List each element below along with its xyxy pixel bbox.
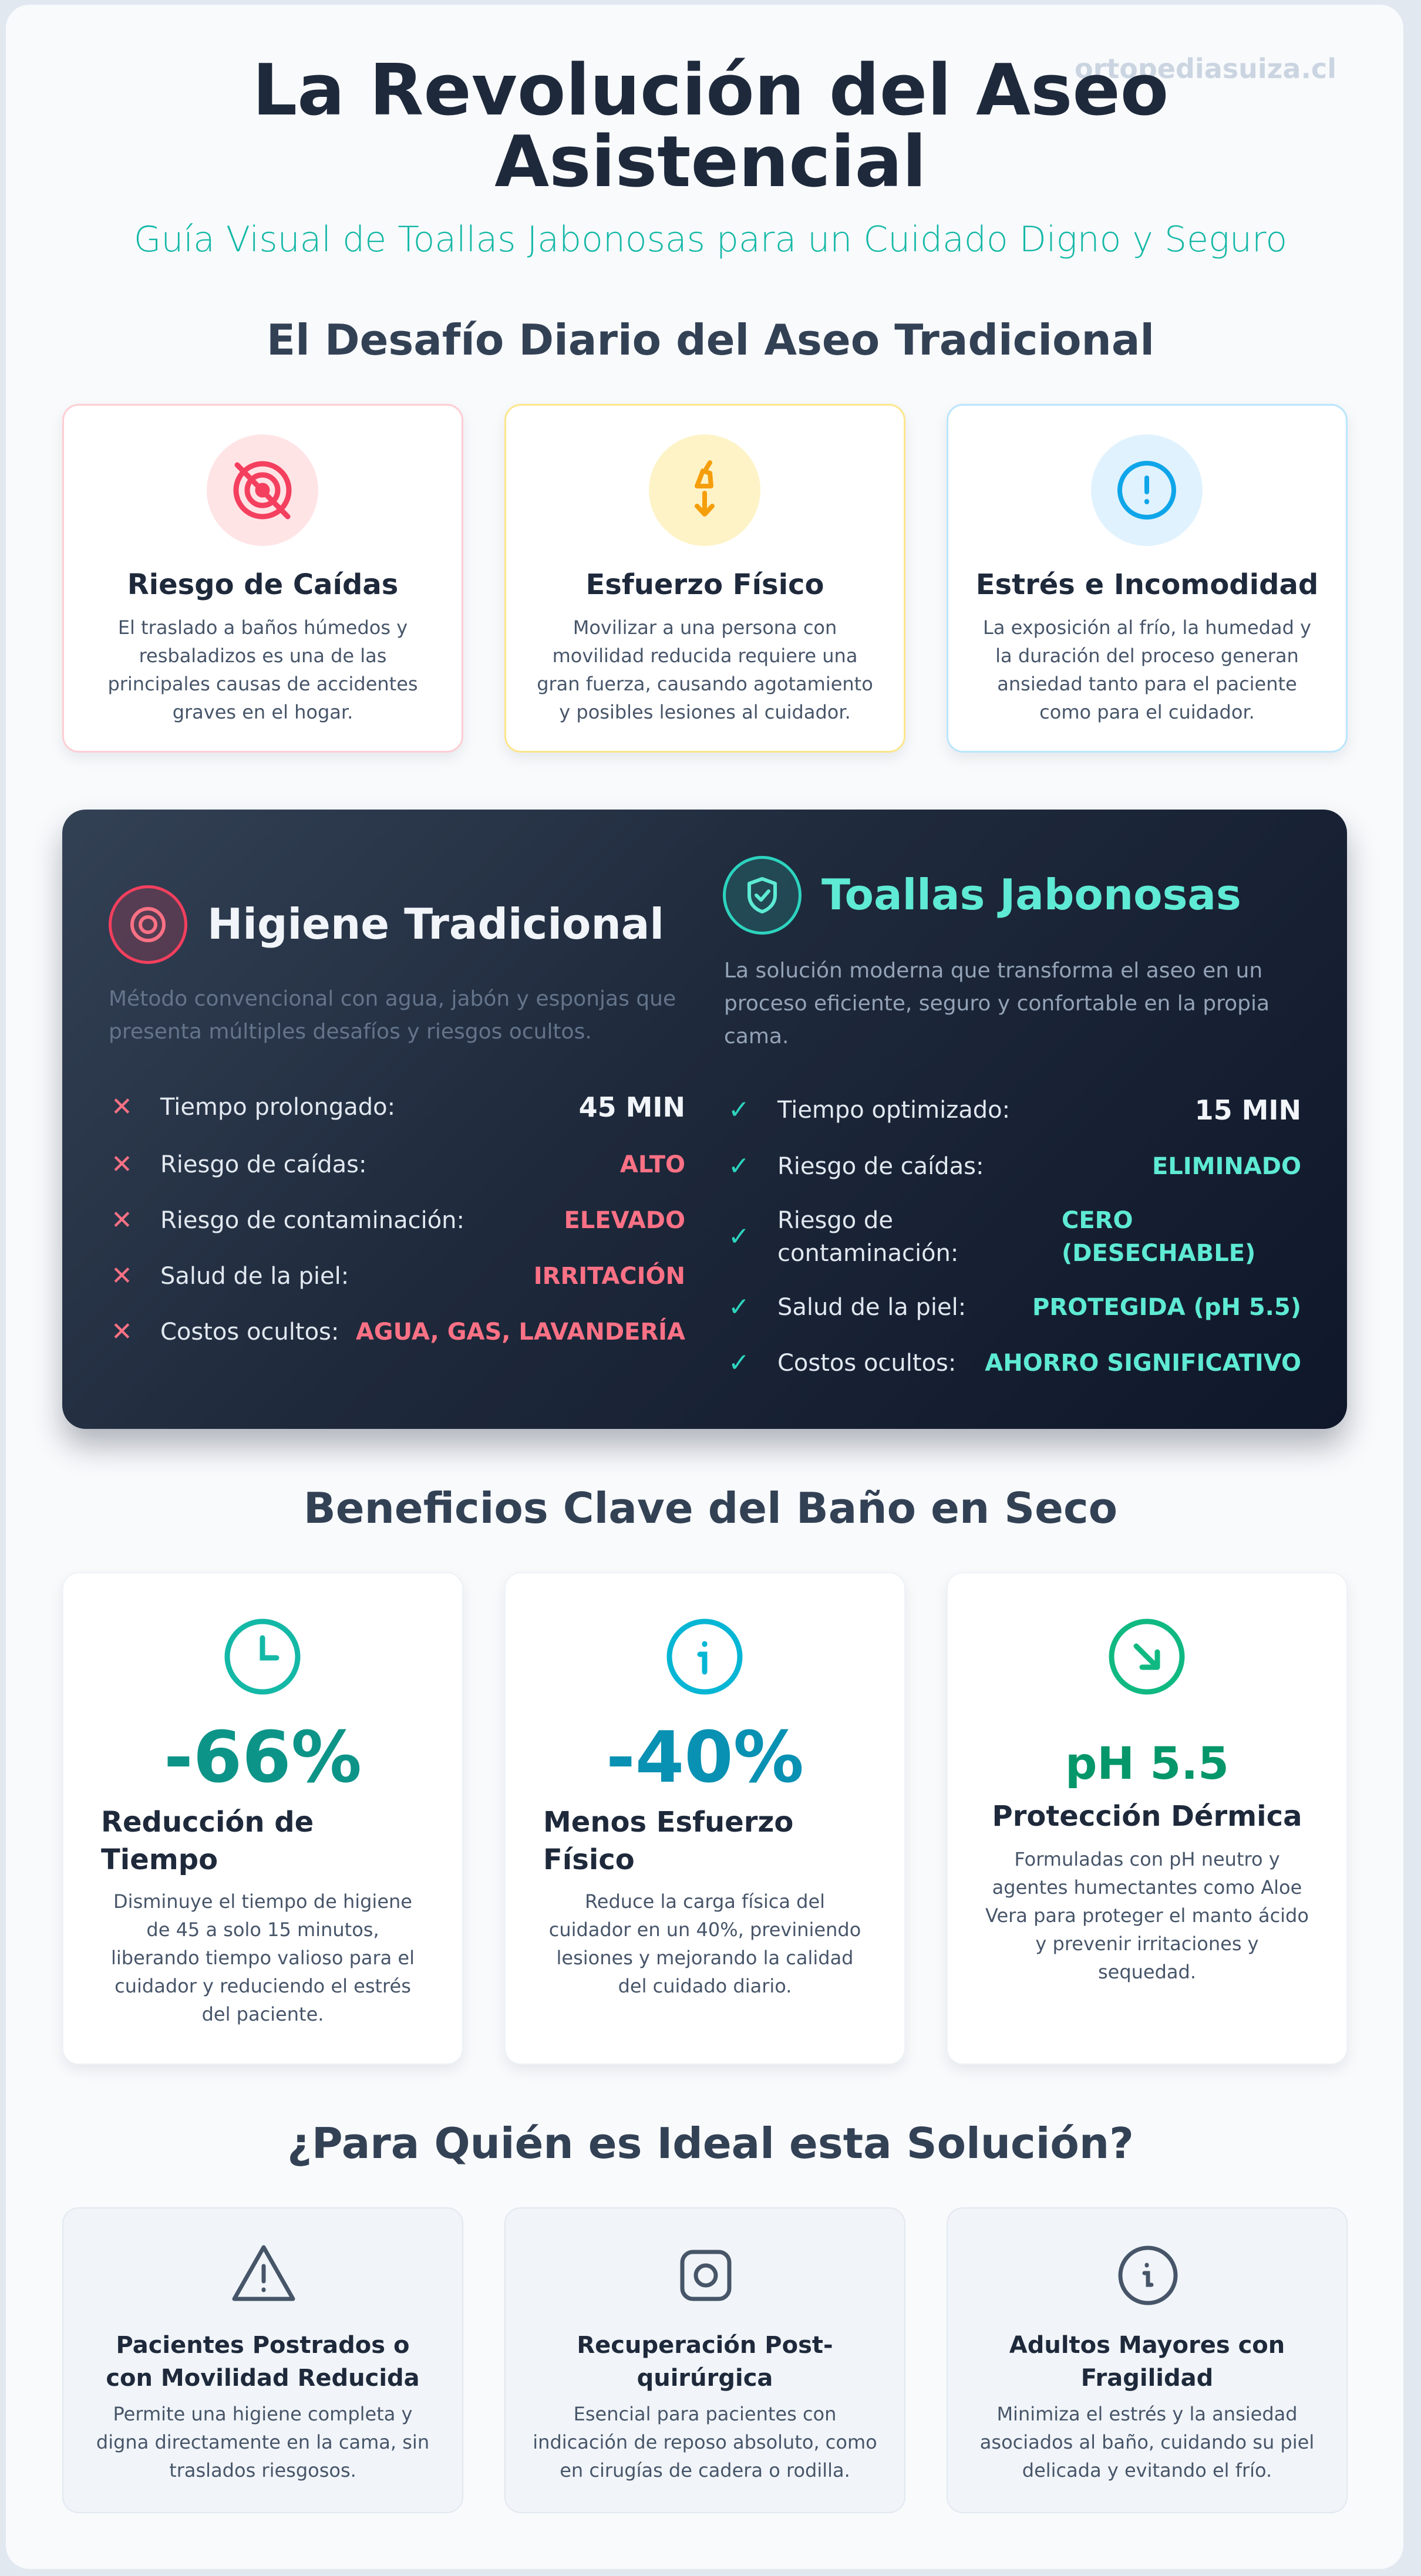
list: traditional: ALTO (620, 1151, 685, 1178)
icon: lift (649, 434, 760, 546)
list: traditional: AGUA, GAS, LAVANDERÍA (356, 1319, 685, 1346)
list: toallas: AHORRO SIGNIFICATIVO (985, 1350, 1301, 1377)
icon: traditional (109, 885, 187, 964)
list: traditional (111, 1091, 685, 1347)
card title: con Movilidad Reducida (106, 2365, 420, 2392)
card title (1009, 2332, 1285, 2392)
card title: Menos Esfuerzo (543, 1806, 793, 1839)
list: traditional: Riesgo de caídas: (160, 1151, 366, 1178)
list: toallas: ✓ (728, 1348, 750, 1378)
watermark: ortopediasuiza.cl (1075, 53, 1336, 85)
card title: Estrés e Incomodidad (976, 568, 1318, 601)
list: toallas: Tiempo optimizado: (777, 1097, 1010, 1124)
list: toallas: ✓ (728, 1222, 750, 1252)
list: traditional: Riesgo de contaminación: (160, 1207, 464, 1234)
card title: Esfuerzo Físico (586, 568, 824, 601)
card title: Riesgo de Caídas (127, 568, 398, 601)
list: traditional: ✕ (111, 1092, 133, 1122)
card text: Movilizar a una persona con movilidad reducida requiere una gran fuerza, causando agotamiento y posibles lesiones al cuidador. (537, 616, 873, 723)
card: riesgo de caídas (62, 404, 463, 753)
card text: El traslado a baños húmedos y resbaladizos es una de las principales causas de accidentes graves en el hogar. (107, 616, 418, 723)
heading: desafío: El Desafío Diario del Aseo Tradicional (267, 315, 1154, 365)
card text: Esencial para pacientes con indicación de reposo absoluto, como en cirugías de cadera o rodilla. (533, 2403, 877, 2481)
card: -40% (504, 1572, 905, 2065)
list: toallas: contaminación: (777, 1240, 958, 1267)
card title: Protección Dérmica (992, 1800, 1302, 1833)
card text: Disminuye el tiempo de higiene de 45 a solo 15 minutos, liberando tiempo valioso para el cuidador y reduciendo el estrés del paciente. (111, 1890, 415, 2025)
list: traditional: 45 MIN (579, 1091, 685, 1123)
panel: comparison (62, 810, 1347, 1429)
card text: Minimiza el estrés y la ansiedad asociados al baño, cuidando su piel delicada y evitando el frío. (980, 2403, 1314, 2481)
card title: Adultos Mayores con (1009, 2332, 1285, 2359)
heading: para quién: ¿Para Quién es Ideal esta Solución? (287, 2119, 1134, 2168)
icon: shield (723, 856, 802, 935)
stat: pH 5.5 (1065, 1737, 1229, 1789)
list: toallas: PROTEGIDA (pH 5.5) (1032, 1294, 1301, 1321)
list: toallas: CERO (1062, 1207, 1133, 1234)
list: toallas: ✓ (728, 1151, 750, 1181)
card title: Pacientes Postrados o (116, 2332, 410, 2359)
card: esfuerzo físico (504, 404, 905, 753)
subtitle: Guía Visual de Toallas Jabonosas para un Cuidado Digno y Seguro (134, 219, 1287, 260)
list: toallas (728, 1094, 1301, 1378)
list: traditional: Tiempo prolongado: (160, 1094, 395, 1121)
card: -66% (62, 1572, 463, 2065)
list: toallas: Salud de la piel: (777, 1294, 966, 1321)
icon: clock (224, 1619, 301, 1694)
icon: alert (1091, 434, 1203, 546)
list: traditional: IRRITACIÓN (534, 1263, 685, 1290)
stat: -66% (164, 1717, 362, 1799)
icon: no-fall (207, 434, 318, 546)
list: toallas: 15 MIN (1195, 1094, 1301, 1126)
card title: Recuperación Post- (577, 2332, 833, 2359)
list: toallas: (DESECHABLE) (1062, 1240, 1255, 1267)
list: toallas: Riesgo de caídas: (777, 1153, 984, 1180)
list: toallas: ✓ (728, 1292, 750, 1322)
list: traditional: ✕ (111, 1205, 133, 1235)
card text: Reduce la carga física del cuidador en un 40%, previniendo lesiones y mejorando la calidad del cuidado diario. (549, 1890, 861, 1997)
card title: Tiempo (101, 1843, 218, 1876)
card: pH 5.5 (947, 1572, 1348, 2065)
card: adultos mayores (947, 2207, 1348, 2513)
card title: Reducción de (101, 1806, 314, 1839)
card: estrés (947, 404, 1348, 753)
icon: square (680, 2250, 732, 2301)
text: traditional desc: Método convencional con agua, jabón y esponjas que presenta múltiples desafíos y riesgos ocultos. (109, 987, 676, 1044)
title: Asistencial (494, 122, 927, 203)
card: post-quirúrgica (504, 2207, 905, 2513)
card title: Fragilidad (1081, 2365, 1213, 2392)
icon: info circle (1118, 2246, 1178, 2305)
list: toallas: Costos ocultos: (777, 1350, 956, 1377)
list: traditional: ✕ (111, 1149, 133, 1179)
icon: warning (233, 2245, 295, 2301)
heading: beneficios: Beneficios Clave del Baño en Seco (304, 1483, 1117, 1533)
list: toallas: Riesgo de (777, 1207, 893, 1234)
card title: Físico (543, 1843, 635, 1876)
card: postrados (62, 2207, 463, 2513)
card text: La exposición al frío, la humedad y la duración del proceso generan ansiedad tanto para el paciente como para el cuidador. (983, 616, 1311, 723)
card text: Formuladas con pH neutro y agentes humectantes como Aloe Vera para proteger el manto ácido y prevenir irritaciones y (985, 1848, 1309, 1955)
card title: quirúrgica (637, 2365, 773, 2392)
list: traditional: ELEVADO (564, 1207, 685, 1234)
list: traditional: ✕ (111, 1261, 133, 1291)
list: traditional: Costos ocultos: (160, 1319, 339, 1346)
card text: Permite una higiene completa y digna directamente en la cama, sin traslados riesgosos. (96, 2403, 429, 2481)
list: traditional: ✕ (111, 1317, 133, 1347)
card title (577, 2332, 833, 2392)
card text: sequedad. (1098, 1961, 1196, 1983)
stat: -40% (606, 1717, 804, 1799)
list: toallas: ELIMINADO (1152, 1153, 1301, 1180)
title: La Revolución del Aseo (252, 50, 1169, 132)
heading: traditional: Higiene Tradicional (207, 899, 664, 949)
card title (106, 2332, 420, 2392)
icon: arrow (1109, 1619, 1185, 1694)
list: traditional: Salud de la piel: (160, 1263, 349, 1290)
heading: toallas: Toallas Jabonosas (821, 870, 1241, 919)
list: toallas: ✓ (728, 1095, 750, 1125)
card title (101, 1806, 314, 1876)
text: toallas desc: La solución moderna que transforma el aseo en un proceso eficiente, seguro y confortable en la propia cama. (724, 959, 1270, 1048)
icon: info (667, 1619, 742, 1694)
title (252, 50, 1169, 203)
card title (543, 1806, 793, 1876)
